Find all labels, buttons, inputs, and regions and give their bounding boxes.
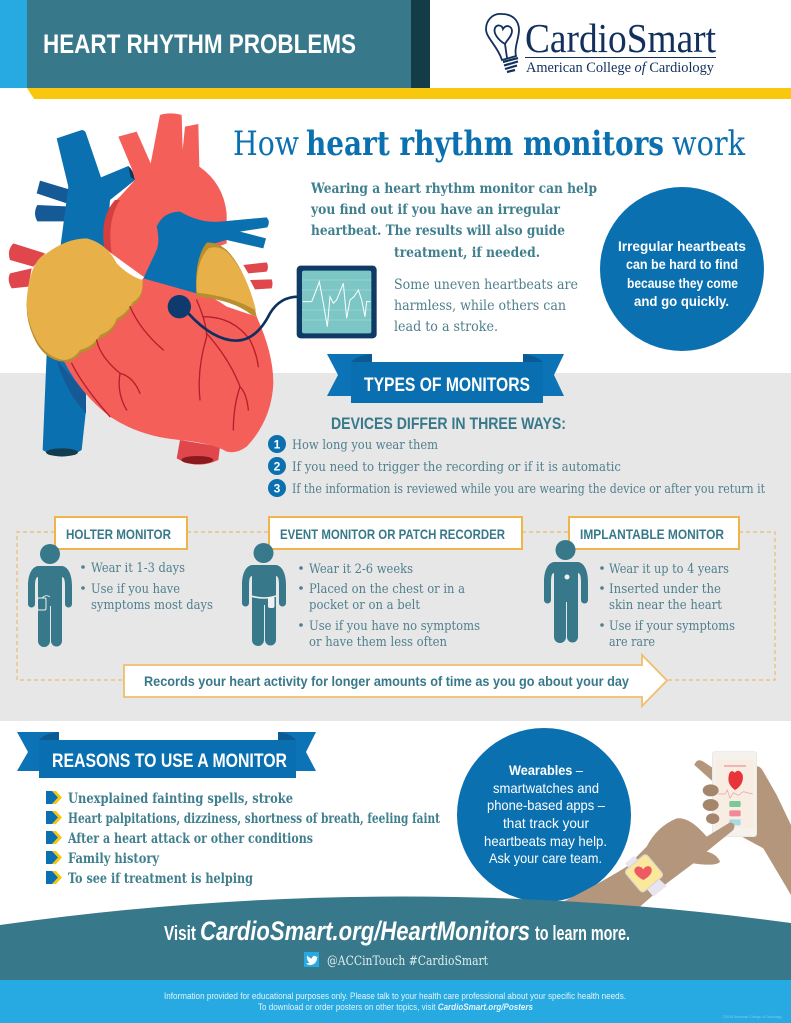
subheading: devices differ: DEVICES DIFFER IN THREE WAYS:: [331, 414, 566, 433]
heading: implantable: IMPLANTABLE MONITOR: [580, 526, 724, 542]
title: How: [233, 124, 299, 164]
logo: CardioSmart: [486, 14, 717, 76]
holter details: symptoms most days: [91, 598, 213, 613]
aorta: [105, 113, 227, 277]
fingers: [703, 784, 719, 824]
footer disclaimer: [0, 980, 791, 1023]
callout: irregular heartbeats: Irregular heartbeats: [618, 239, 746, 254]
reasons list: Unexplained fainting spells, stroke: [68, 791, 293, 807]
reasons list: Heart palpitations, dizziness, shortness of breath, feeling faint: [68, 811, 441, 827]
heart monitor screen: [297, 266, 377, 338]
event details: or have them less often: [309, 635, 448, 650]
ribbon heading: reasons to use a monitor: REASONS TO USE A MONITOR: [52, 750, 287, 772]
reasons list: After a heart attack or other conditions: [67, 831, 313, 847]
icon: person with holter device: [28, 544, 72, 647]
item 1: How long you wear them: [292, 438, 438, 453]
holter details: Use if you have: [91, 582, 180, 597]
illustration: hands with phone and smartwatch: [563, 752, 791, 907]
panel: implantable monitor: [544, 517, 739, 650]
title: heart rhythm monitors: [306, 124, 664, 164]
item 2: 2: [274, 460, 281, 474]
pulmonary artery: [143, 212, 269, 293]
holding hand: [694, 760, 791, 895]
gray background band: [0, 373, 791, 721]
icon: person with patch recorder: [242, 543, 286, 646]
footer disclaimer: To download or order posters on other topics, visit CardioSmart.org/Posters: [258, 1002, 533, 1012]
callout: wearables: phone-based apps –: [487, 797, 605, 813]
numbered list: [268, 435, 766, 497]
reasons list: [46, 791, 441, 887]
header banner: [0, 0, 791, 99]
implantable details: Inserted under the: [609, 582, 721, 597]
illustration: heart: [9, 113, 377, 465]
reasons list: To see if treatment is helping: [68, 871, 253, 887]
title: work: [672, 124, 745, 164]
secondary text: lead to a stroke.: [394, 319, 498, 335]
reasons list: Family history: [68, 851, 160, 867]
call to action: CardioSmart.org/HeartMonitors: [200, 916, 530, 946]
event details: Wear it 2-6 weeks: [309, 562, 413, 577]
ribbon heading: reasons to use a monitor: [17, 732, 316, 778]
callout: irregular heartbeats: [600, 187, 764, 351]
heading: event: [269, 517, 522, 549]
callout: irregular heartbeats: can be hard to find: [626, 257, 738, 272]
event details: Placed on the chest or in a: [309, 582, 465, 597]
callout: irregular heartbeats: because they come: [627, 276, 738, 291]
callout: wearables: heartbeats may help.: [484, 833, 607, 849]
logo: CardioSmart: American College of Cardiology: [526, 60, 714, 76]
implantable details: skin near the heart: [609, 598, 723, 613]
social handles: @ACCinTouch #CardioSmart: [327, 954, 489, 969]
heading: event: EVENT MONITOR OR PATCH RECORDER: [280, 526, 505, 542]
secondary text: harmless, while others can: [394, 298, 566, 314]
arrow: longer recording time: Records your heart activity for longer amounts of time as you go about your day: [144, 673, 629, 689]
item 1: 1: [274, 438, 281, 452]
callout: wearables: [457, 728, 631, 902]
footer curve: [0, 896, 791, 980]
item 1: [268, 435, 438, 453]
right atrium: [27, 238, 143, 362]
secondary text: Some uneven heartbeats are: [394, 277, 578, 293]
callout: wearables: Wearables –: [509, 762, 583, 778]
panel: holter monitor: [28, 517, 213, 647]
intro text: you find out if you have an irregular: [310, 202, 561, 218]
heading: implantable: [569, 517, 739, 549]
call to action: Visit: [164, 923, 196, 945]
phone: [712, 752, 757, 837]
implantable details: Use if your symptoms: [609, 619, 735, 634]
footer disclaimer: ©2018 American College of Cardiology: [723, 1015, 782, 1019]
small vessels: [9, 243, 272, 465]
header title: HEART RHYTHM PROBLEMS: [43, 29, 356, 59]
icon: twitter: [304, 952, 319, 967]
intro text: treatment, if needed.: [394, 245, 540, 261]
coronary vessels: [72, 300, 258, 430]
footer disclaimer: Information provided for educational purposes only. Please talk to your health care professional about your specific health needs.: [164, 991, 626, 1001]
icon: person with implant: [544, 540, 588, 643]
arrow: longer recording time: [124, 655, 667, 706]
callout: irregular heartbeats: and go quickly.: [634, 294, 729, 309]
callout: wearables: Ask your care team.: [489, 850, 602, 866]
pointing hand and arm: [563, 818, 734, 907]
ventricles: [63, 278, 273, 452]
event details: [299, 562, 480, 650]
ribbon heading: types of monitors: TYPES OF MONITORS: [364, 374, 530, 396]
intro text: [310, 181, 597, 261]
call to action: to learn more.: [535, 923, 630, 945]
heading: holter: HOLTER MONITOR: [66, 526, 171, 542]
vena cava: [35, 130, 135, 457]
callout: wearables: smartwatches and: [493, 780, 599, 796]
implantable details: Wear it up to 4 years: [609, 562, 729, 577]
electrode and wire: [168, 295, 298, 341]
intro text: heartbeat. The results will also guide: [311, 223, 565, 239]
left atrium: [196, 243, 257, 317]
heading: holter: [55, 517, 187, 549]
implantable details: [600, 562, 735, 650]
item 2: If you need to trigger the recording or if it is automatic: [292, 460, 621, 475]
holter details: Wear it 1-3 days: [91, 561, 185, 576]
item 3: 3: [274, 482, 281, 496]
intro text: Wearing a heart rhythm monitor can help: [310, 181, 597, 197]
secondary text: [394, 277, 578, 335]
event details: pocket or on a belt: [309, 598, 421, 613]
panel: event monitor: [242, 517, 522, 650]
holter details: [81, 561, 213, 613]
smartwatch: [624, 854, 667, 897]
implantable details: are rare: [609, 635, 655, 650]
logo: CardioSmart: CardioSmart: [525, 15, 717, 61]
ribbon heading: types of monitors: [327, 354, 564, 403]
event details: Use if you have no symptoms: [309, 619, 480, 634]
callout: wearables: that track your: [503, 815, 589, 831]
